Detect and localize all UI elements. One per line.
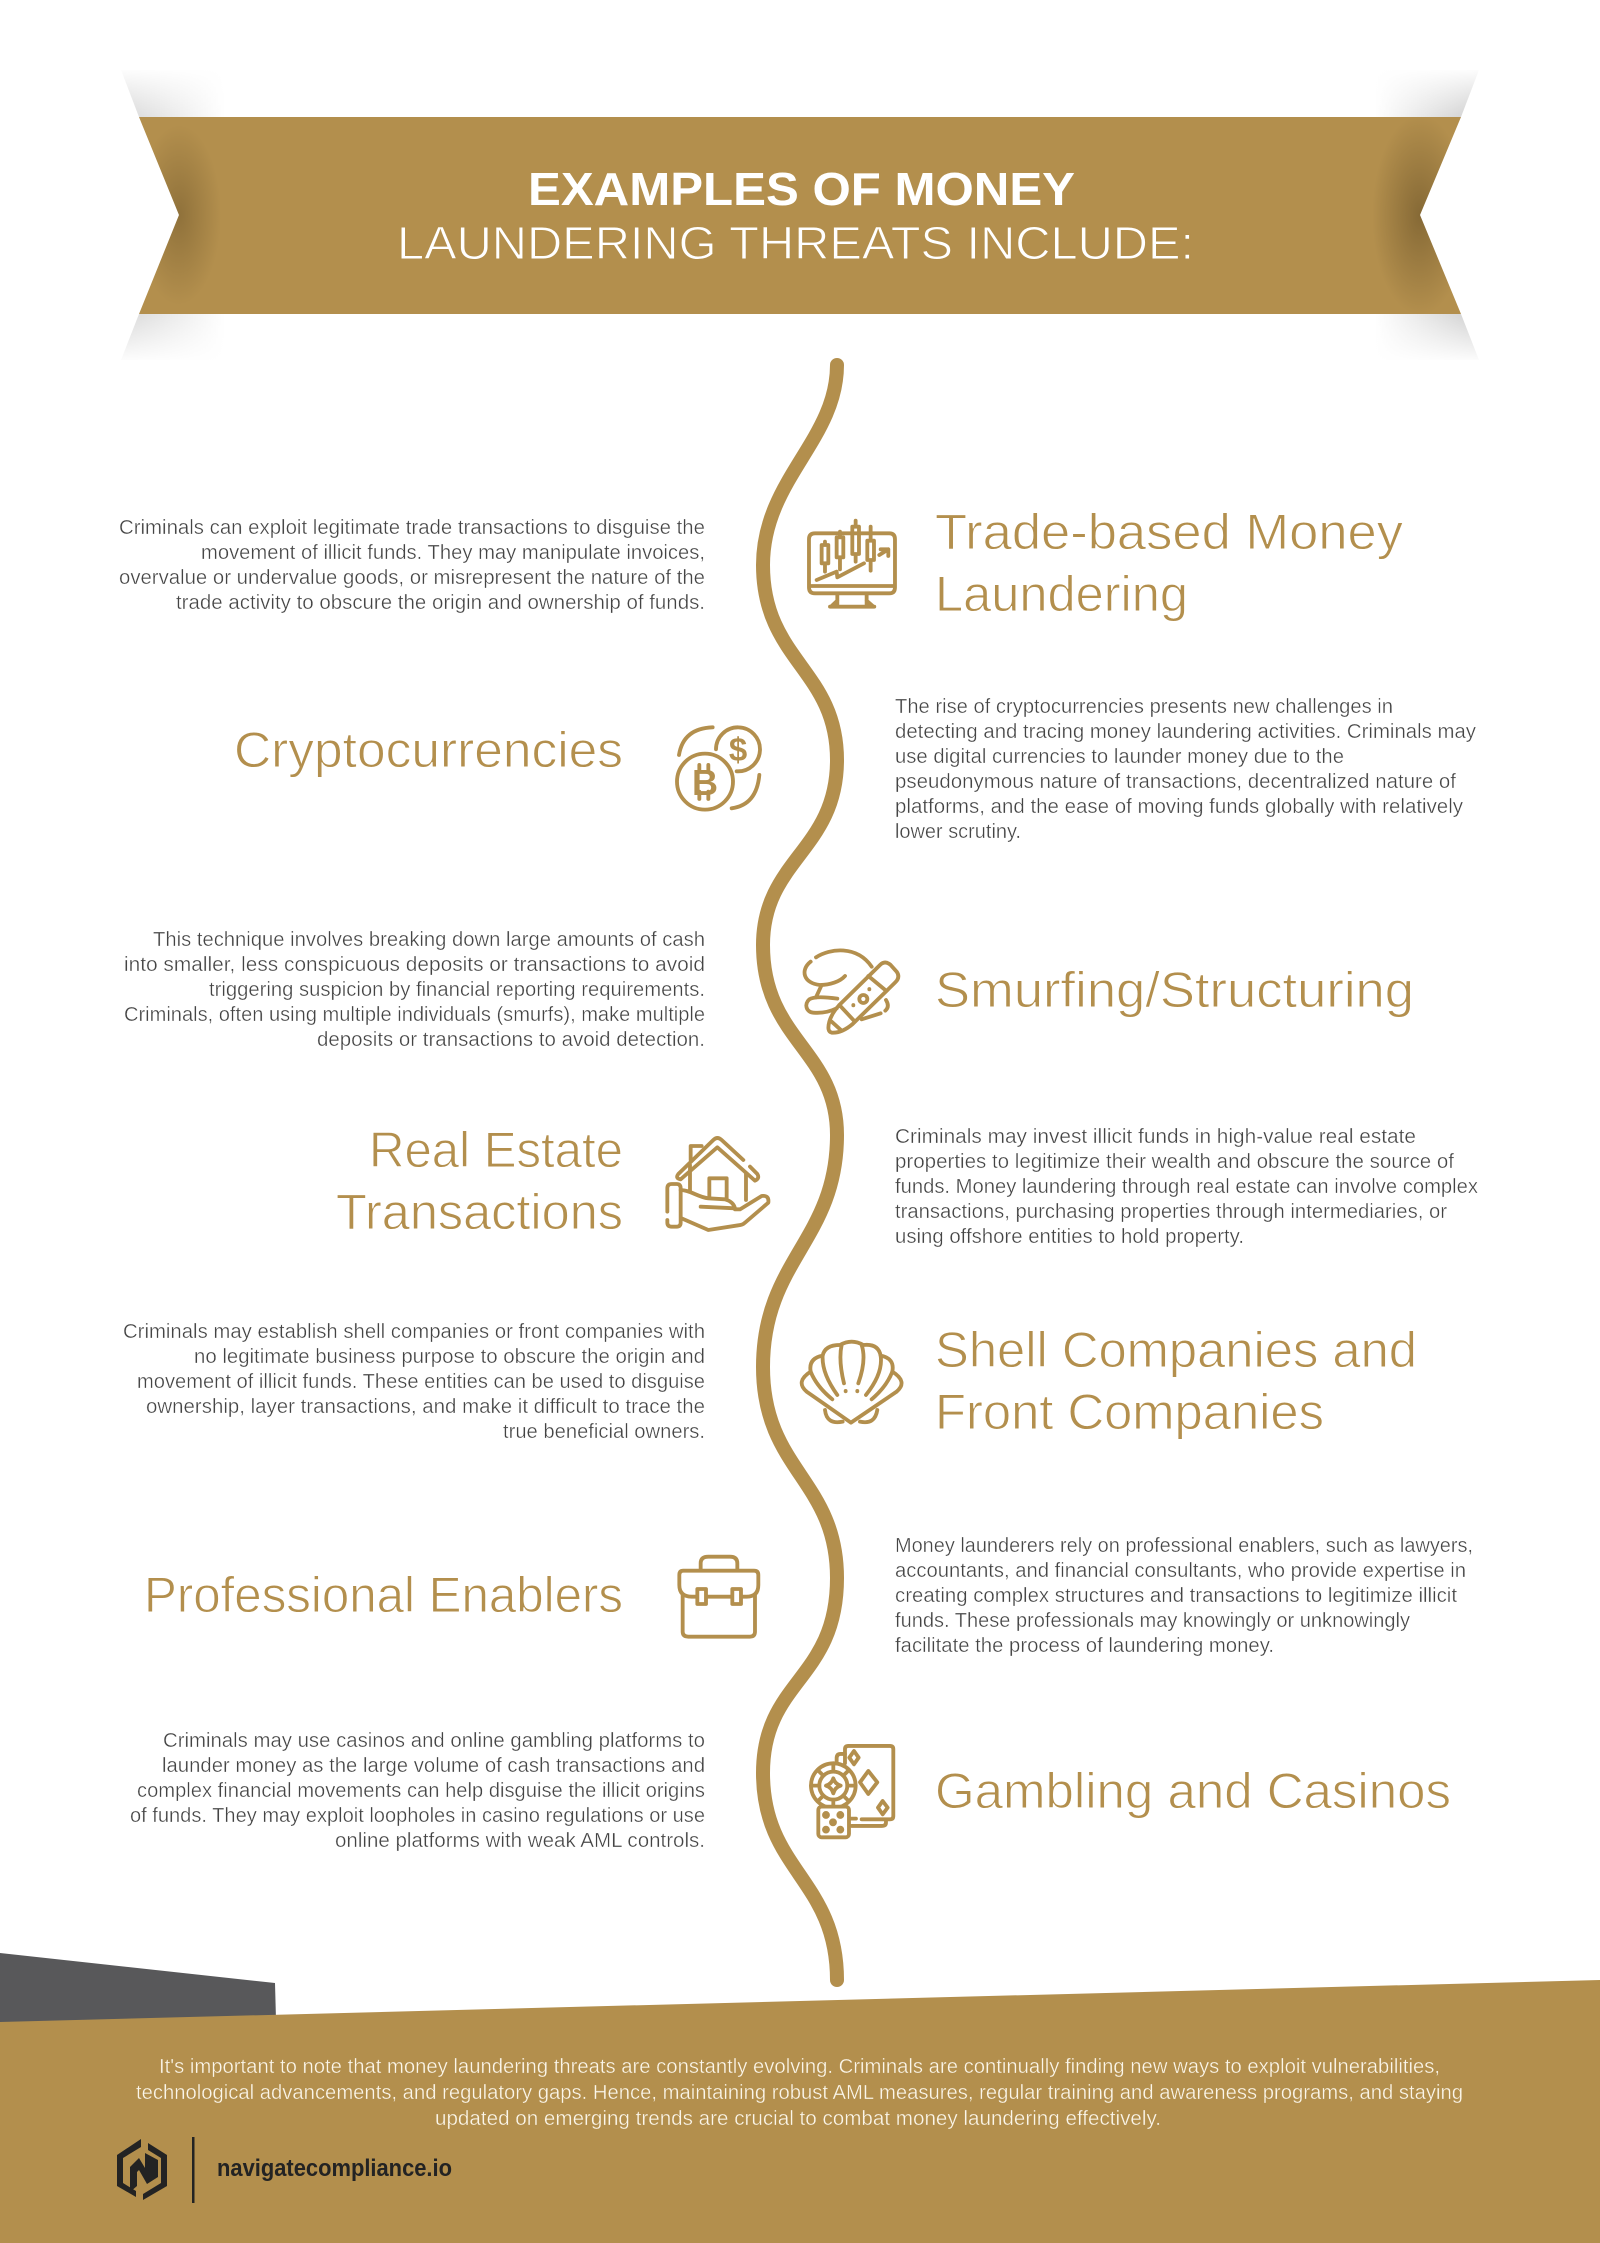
description: overvalue or undervalue goods, or misrepresent the nature of the xyxy=(119,567,705,589)
description: complex financial movements can help disguise the illicit origins xyxy=(137,1780,705,1802)
description: detecting and tracing money laundering activities. Criminals may xyxy=(895,721,1476,743)
description: trade activity to obscure the origin and ownership of funds. xyxy=(176,592,705,614)
icon: house in hand xyxy=(667,1138,768,1230)
description: Criminals may establish shell companies or front companies with xyxy=(123,1321,705,1343)
panel: shell companies and front companies xyxy=(123,1321,1417,1443)
heading: Trade-based Money xyxy=(935,504,1403,560)
description xyxy=(123,1321,705,1443)
icon: seashell xyxy=(802,1342,902,1423)
description: properties to legitimize their wealth and obscure the source of xyxy=(895,1151,1454,1173)
logo mark xyxy=(117,2139,167,2200)
divider xyxy=(192,2137,194,2203)
description: using offshore entities to hold property. xyxy=(895,1226,1244,1248)
description: Criminals may invest illicit funds in high-value real estate xyxy=(895,1126,1416,1148)
heading: Transactions xyxy=(336,1184,623,1240)
heading xyxy=(935,1322,1417,1440)
heading xyxy=(336,1122,623,1240)
description: launder money as the large volume of cash transactions and xyxy=(162,1755,705,1777)
panel: real estate transactions xyxy=(336,1122,1478,1248)
description: This technique involves breaking down large amounts of cash xyxy=(153,929,705,951)
description: movement of illicit funds. They may manipulate invoices, xyxy=(201,542,705,564)
icon: candlestick chart monitor xyxy=(809,521,895,607)
icon: coins: B xyxy=(692,762,718,803)
banner fold shadows xyxy=(115,68,1485,363)
icon: cards, chip and dice xyxy=(811,1746,893,1837)
heading: Gambling and Casinos xyxy=(935,1763,1451,1819)
title banner xyxy=(115,68,1485,363)
description xyxy=(895,1535,1473,1657)
panel: cryptocurrencies xyxy=(234,696,1476,843)
panel: professional enablers xyxy=(144,1535,1473,1657)
icon: coins xyxy=(677,727,760,810)
heading: Real Estate xyxy=(369,1122,623,1178)
description: deposits or transactions to avoid detection. xyxy=(317,1029,705,1051)
panel: trade-based money laundering xyxy=(119,504,1403,622)
heading: Smurfing/Structuring xyxy=(935,962,1414,1018)
heading: Front Companies xyxy=(935,1384,1324,1440)
icon: briefcase xyxy=(679,1557,758,1637)
footer logo and website xyxy=(117,2137,452,2203)
website: navigatecompliance.io xyxy=(217,2155,452,2182)
description xyxy=(895,1126,1478,1248)
description: The rise of cryptocurrencies presents new challenges in xyxy=(895,696,1393,718)
heading: Cryptocurrencies xyxy=(234,722,623,778)
panel: gambling and casinos xyxy=(130,1730,1451,1852)
description: pseudonymous nature of transactions, decentralized nature of xyxy=(895,771,1456,793)
heading: Shell Companies and xyxy=(935,1322,1417,1378)
footer band xyxy=(0,1980,1600,2243)
description: accountants, and financial consultants, who provide expertise in xyxy=(895,1560,1466,1582)
description: Criminals may use casinos and online gambling platforms to xyxy=(163,1730,705,1752)
footer grey accent xyxy=(0,1953,276,2025)
description xyxy=(124,929,705,1051)
icon: hand holding pen xyxy=(805,950,898,1033)
description: funds. These professionals may knowingly or unknowingly xyxy=(895,1610,1410,1632)
footer note xyxy=(136,2056,1463,2130)
description: Criminals, often using multiple individuals (smurfs), make multiple xyxy=(124,1004,705,1026)
heading: Laundering xyxy=(935,566,1188,622)
description: ownership, layer transactions, and make it difficult to trace the xyxy=(146,1396,705,1418)
panel: smurfing / structuring xyxy=(124,929,1414,1051)
description: movement of illicit funds. These entities can be used to disguise xyxy=(137,1371,705,1393)
title text xyxy=(397,163,1194,269)
description: platforms, and the ease of moving funds globally with relatively xyxy=(895,796,1463,818)
heading xyxy=(935,504,1403,622)
footer note: updated on emerging trends are crucial to combat money laundering effectively. xyxy=(435,2108,1161,2130)
description: facilitate the process of laundering money. xyxy=(895,1635,1274,1657)
wavy timeline xyxy=(763,365,837,1980)
description: transactions, purchasing properties through intermediaries, or xyxy=(895,1201,1447,1223)
description: triggering suspicion by financial reporting requirements. xyxy=(209,979,705,1001)
title text: EXAMPLES OF MONEY xyxy=(528,163,1075,215)
description xyxy=(895,696,1476,843)
footer note: It's important to note that money laundering threats are constantly evolving. Criminals are continually finding new ways to exploit vulnerabilities, xyxy=(159,2056,1440,2078)
description xyxy=(119,517,705,614)
footer note: technological advancements, and regulatory gaps. Hence, maintaining robust AML measures, regular training and awareness programs, and staying xyxy=(136,2082,1463,2104)
description: into smaller, less conspicuous deposits or transactions to avoid xyxy=(124,954,705,976)
description: true beneficial owners. xyxy=(503,1421,705,1443)
description: lower scrutiny. xyxy=(895,821,1021,843)
description: Criminals can exploit legitimate trade transactions to disguise the xyxy=(119,517,705,539)
description xyxy=(130,1730,705,1852)
description: online platforms with weak AML controls. xyxy=(335,1830,705,1852)
banner ribbon xyxy=(139,117,1461,314)
description: no legitimate business purpose to obscure the origin and xyxy=(194,1346,705,1368)
description: of funds. They may exploit loopholes in casino regulations or use xyxy=(130,1805,705,1827)
icon: coins: $ xyxy=(729,731,747,768)
description: creating complex structures and transactions to legitimize illicit xyxy=(895,1585,1457,1607)
description: use digital currencies to launder money due to the xyxy=(895,746,1344,768)
title text: LAUNDERING THREATS INCLUDE: xyxy=(397,217,1194,269)
description: funds. Money laundering through real estate can involve complex xyxy=(895,1176,1478,1198)
description: Money launderers rely on professional enablers, such as lawyers, xyxy=(895,1535,1473,1557)
heading: Professional Enablers xyxy=(144,1567,623,1623)
